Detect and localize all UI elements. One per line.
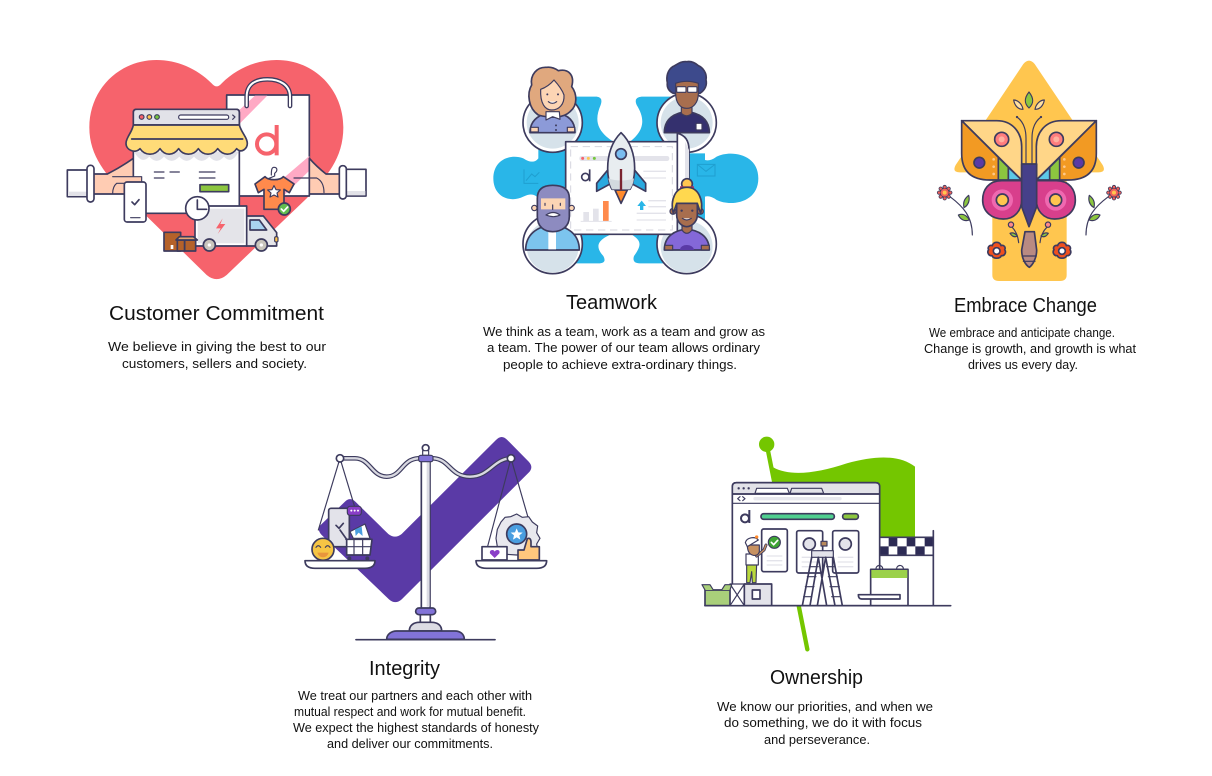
- text: Integrity description: We expect the highest standards of honesty: [293, 720, 539, 735]
- heading: Ownership: Ownership: [770, 667, 863, 689]
- card middle: [797, 531, 823, 573]
- beam: [336, 445, 515, 477]
- icon: rocket: [597, 133, 646, 203]
- document with rocket: [566, 133, 689, 234]
- leaves: [1014, 92, 1044, 109]
- heart background: [89, 60, 343, 279]
- icon: phone: [329, 508, 349, 547]
- icon: thumbs up: [518, 538, 539, 560]
- avatar circle: top right: [657, 93, 716, 152]
- icon: left hand: [67, 158, 133, 202]
- butterfly: [962, 116, 1096, 227]
- text: Teamwork description: a team. The power of our team allows ordinary: [487, 340, 760, 355]
- icon: chat bubble: [347, 506, 361, 515]
- ladder: [802, 541, 842, 606]
- ground line: [705, 603, 951, 608]
- avatar circle: bottom left: [523, 214, 582, 274]
- icon: parcels: [164, 232, 197, 251]
- text: Customer Commitment description: customers, sellers and society.: [122, 356, 307, 371]
- icon: faint envelope: [697, 164, 715, 176]
- column and base: [356, 460, 495, 640]
- cocoon: [1022, 232, 1037, 267]
- text: Integrity description: mutual respect and work for mutual benefit.: [294, 704, 526, 719]
- finish line flag: [879, 531, 933, 606]
- person: woman with wavy hair: [529, 67, 576, 133]
- text: Ownership description: We know our priorities, and when we: [717, 699, 933, 714]
- left pan strings: [318, 458, 357, 530]
- icon: smiley: [312, 538, 334, 560]
- card right: [833, 531, 859, 573]
- text: Ownership description: [717, 699, 933, 747]
- panel: Embrace Change: [924, 61, 1136, 372]
- illustration: flag, browser and worker: [702, 437, 951, 649]
- yellow arrow: [954, 61, 1104, 281]
- text: Ownership description: and perseverance.: [764, 732, 870, 747]
- text: Embrace Change description: drives us every day.: [968, 357, 1078, 372]
- worker on box: [745, 535, 766, 583]
- panel: Customer Commitment: [67, 60, 366, 371]
- panel: Teamwork: [483, 62, 765, 372]
- illustration: heart with shop, bag, hands and truck: [67, 60, 366, 279]
- heading: Teamwork: Teamwork: [566, 292, 658, 314]
- purple checkmark: [319, 437, 531, 602]
- puzzle piece: [493, 97, 758, 263]
- calendar: [858, 565, 908, 606]
- right stem with flower: [1086, 185, 1121, 235]
- text: Embrace Change description: Change is growth, and growth is what: [924, 341, 1136, 356]
- icon: rosette badge: [496, 514, 540, 555]
- right pan strings: [487, 458, 532, 550]
- heading: Customer Commitment: Customer Commitment: [109, 303, 324, 325]
- illustration: puzzle piece and team: [493, 62, 758, 274]
- text: Integrity description: [293, 688, 539, 751]
- browser window: [732, 483, 880, 606]
- text: Customer Commitment description: We believe in giving the best to our: [108, 339, 327, 354]
- icon: tag: [350, 524, 370, 538]
- icon: heart card: [482, 547, 507, 560]
- right pan: [476, 561, 547, 568]
- person: man with curly hair and glasses: [664, 62, 709, 133]
- orange flowers: [988, 242, 1071, 258]
- icon: finger over phone: [113, 177, 142, 193]
- text: Customer Commitment description: [108, 339, 327, 371]
- icon: clock: [186, 197, 209, 220]
- panel: Integrity: [293, 437, 547, 751]
- packing boxes: [702, 584, 772, 606]
- icon: delivery truck: [195, 206, 278, 251]
- icon: phone: [124, 182, 146, 222]
- left stem with flower: [937, 185, 972, 235]
- icon: faint chart: [524, 169, 539, 183]
- text: Teamwork description: [483, 324, 765, 372]
- person: bearded man: [526, 185, 579, 250]
- avatar circle: top left: [523, 93, 582, 152]
- heading: Embrace Change: Embrace Change: [954, 295, 1097, 317]
- text: Ownership description: do something, we do it with focus: [724, 715, 923, 730]
- icon: t-shirt on hanger: [255, 167, 294, 215]
- icon: cart: [340, 530, 372, 560]
- green flag: [759, 437, 915, 649]
- icon: online store: [126, 109, 247, 213]
- text: Embrace Change description: [924, 325, 1136, 372]
- text: Embrace Change description: We embrace and anticipate change.: [929, 325, 1115, 340]
- small buds: [1008, 222, 1051, 243]
- person: woman with yellow hair bun: [664, 179, 709, 250]
- text: Teamwork description: We think as a team, work as a team and grow as: [483, 324, 765, 339]
- icon: shopping bag: [227, 79, 309, 196]
- illustration: balance scale over checkmark: [305, 437, 547, 640]
- icon: right hand: [294, 158, 366, 199]
- heading: Integrity: Integrity: [369, 658, 440, 680]
- text: Integrity description: We treat our partners and each other with: [298, 688, 532, 703]
- avatar circle: bottom right: [657, 214, 716, 274]
- illustration: butterfly on an arrow: [937, 61, 1121, 281]
- card with check: [762, 529, 787, 572]
- panel: Ownership: [702, 437, 951, 747]
- left pan: [305, 561, 375, 568]
- text: Integrity description: and deliver our commitments.: [327, 736, 493, 751]
- text: Teamwork description: people to achieve extra-ordinary things.: [503, 357, 737, 372]
